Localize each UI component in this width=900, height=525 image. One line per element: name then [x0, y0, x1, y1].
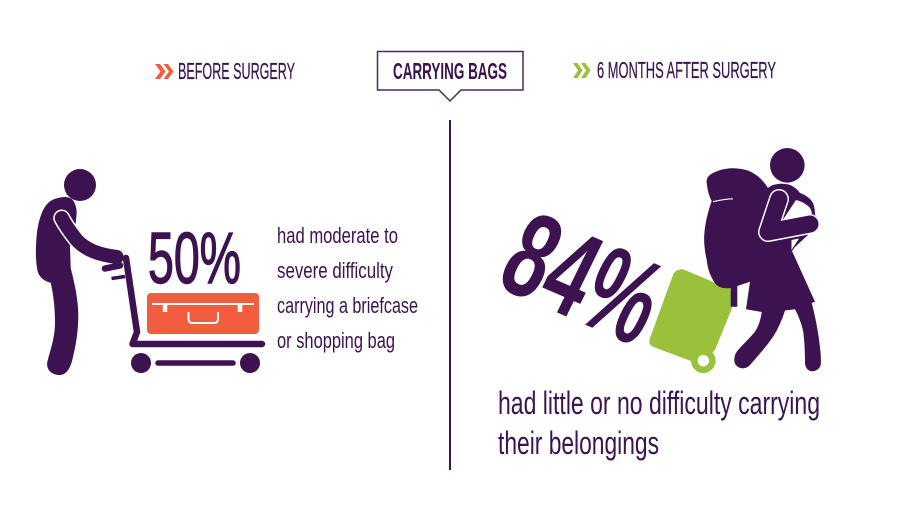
stat: 50%: 50%	[148, 219, 241, 299]
icon: person with backpack	[704, 148, 821, 371]
heading callout: carrying bags	[378, 52, 523, 101]
header: before surgery	[155, 58, 295, 84]
text block: after surgery description: their belongings	[498, 425, 659, 461]
white space inside strap	[780, 200, 812, 224]
icon: man pushing cart	[36, 169, 262, 375]
icon: green suitcase	[649, 269, 732, 373]
text block: before surgery description: or shopping bag	[277, 328, 395, 353]
icon: cart	[112, 258, 262, 373]
text block: after surgery description	[498, 385, 820, 461]
icon: backpack and body	[704, 168, 821, 371]
white backpack line	[713, 199, 733, 202]
stat: 84%: 84%	[483, 186, 685, 370]
icon: head	[770, 148, 805, 183]
text block: before surgery description	[277, 223, 418, 353]
text block: before surgery description: severe difficulty	[277, 258, 393, 283]
white notch under arm	[792, 238, 799, 250]
header: before surgery: BEFORE SURGERY	[178, 58, 295, 84]
icon: arm with white outline	[768, 199, 810, 232]
text block: before surgery description: carrying a briefcase	[277, 293, 418, 318]
icon: orange briefcase	[147, 293, 259, 334]
icon: man	[36, 169, 120, 375]
text block: before surgery description: had moderate to	[277, 223, 398, 248]
header: 6 months after surgery	[573, 57, 776, 83]
heading callout: carrying bags: CARRYING BAGS	[393, 58, 507, 84]
vertical divider	[449, 120, 451, 470]
